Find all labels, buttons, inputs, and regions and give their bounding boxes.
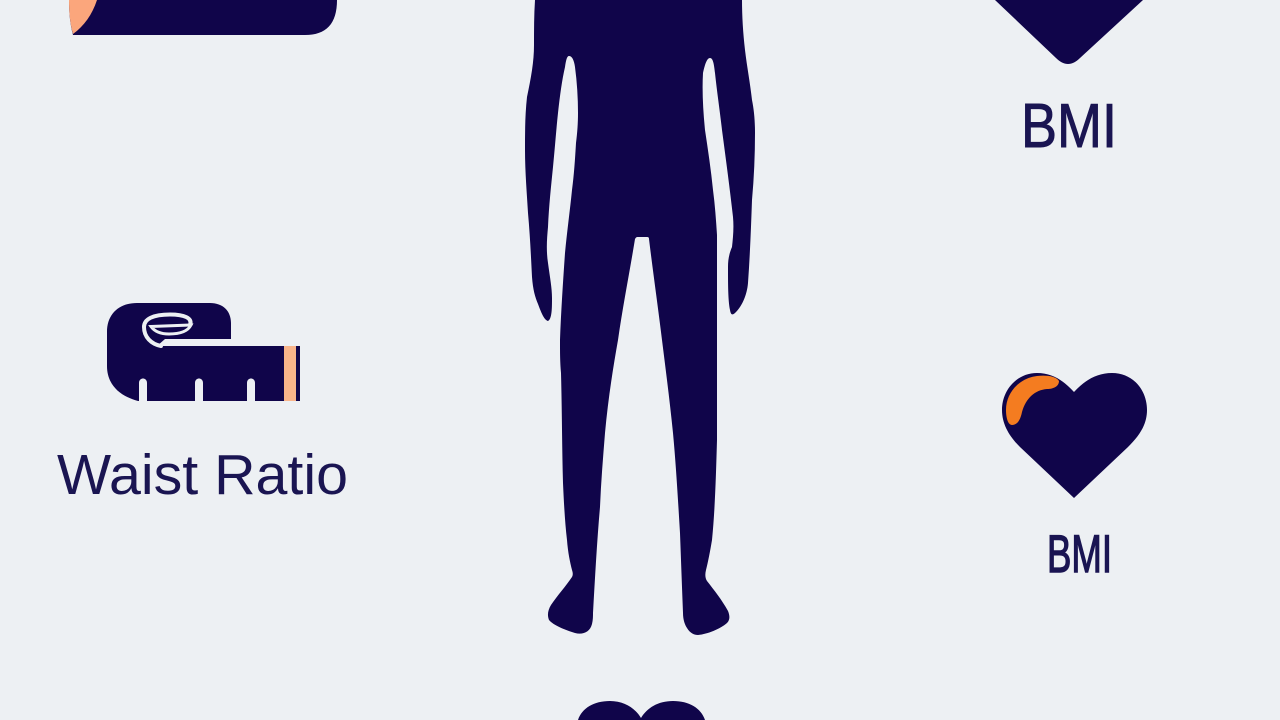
label: BMI, lower right: BMI [1047,525,1112,584]
icon: measuring tape [107,303,300,401]
icon: cropped heart, bottom centre [578,701,705,720]
label: BMI, top right: BMI [1021,92,1117,161]
icon: human body silhouette [525,0,755,635]
icon: cropped heart, top right [995,0,1143,64]
label: Waist Ratio: Waist Ratio [57,443,348,507]
icon: cropped measuring tape, top left [69,0,337,35]
icon: heart with orange highlight [1002,373,1147,498]
